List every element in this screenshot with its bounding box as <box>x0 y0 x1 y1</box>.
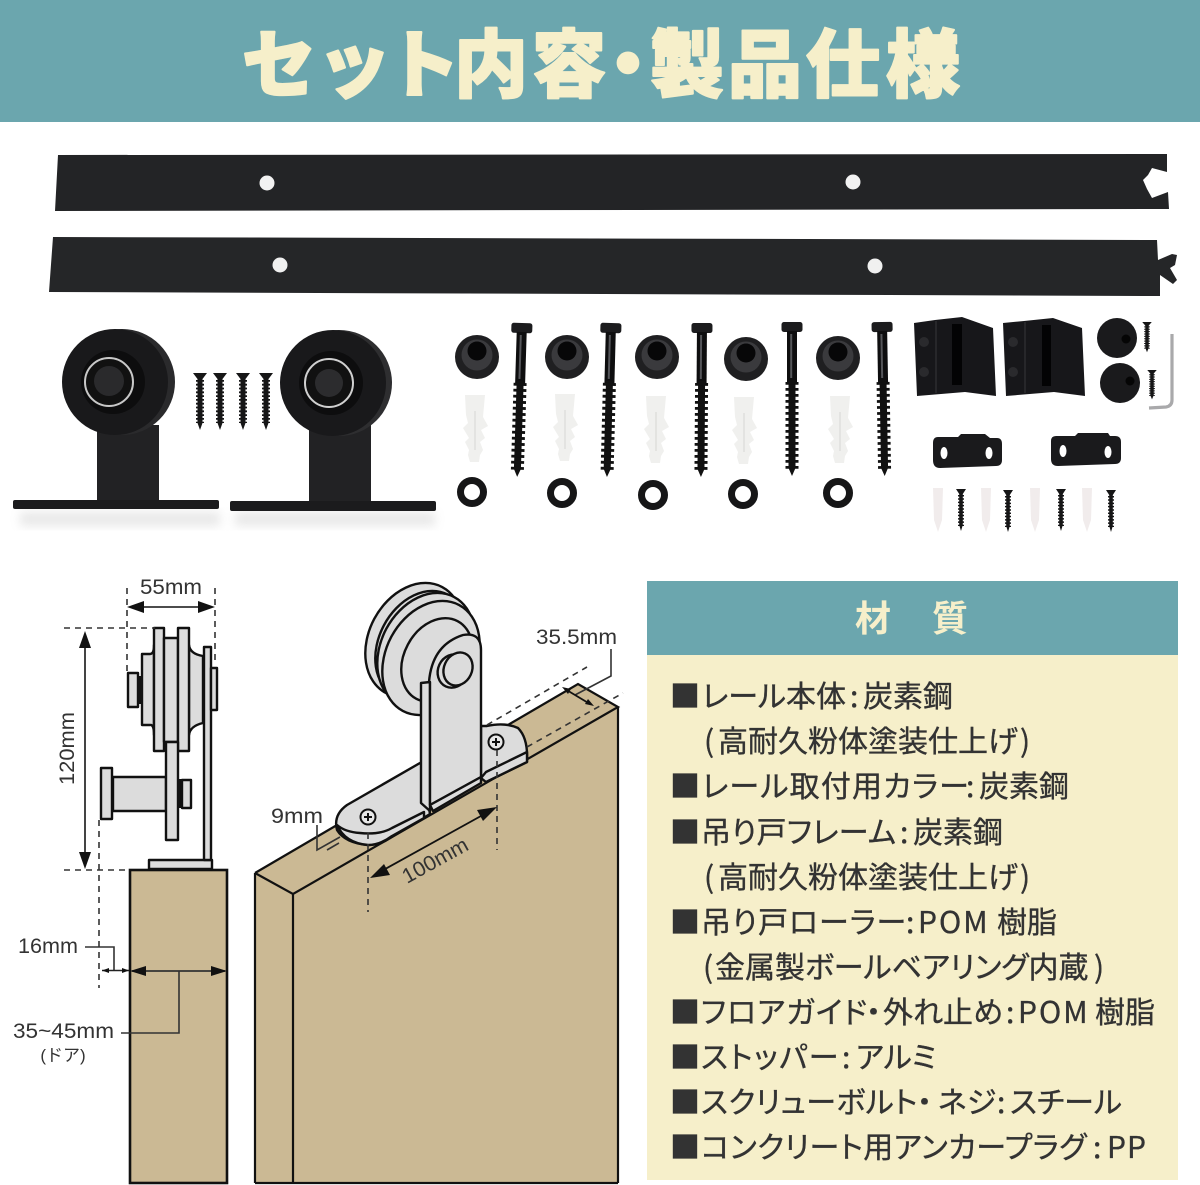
door hanger base plate <box>336 724 527 845</box>
hanger arm <box>421 635 481 811</box>
dimension 9mm: 9mm <box>271 805 323 828</box>
materials list: 樹脂 <box>997 898 1057 942</box>
roller mounting screws <box>193 373 273 430</box>
lag bolts <box>507 322 895 477</box>
materials list: 金属製ボールベアリング内蔵 <box>715 943 1088 987</box>
roller discs <box>346 566 499 732</box>
materials list: : <box>850 672 858 716</box>
materials list: : <box>966 762 974 806</box>
materials list: フロアガイド <box>701 988 868 1032</box>
materials list: スチール <box>1010 1078 1122 1122</box>
materials list: 炭素鋼 <box>913 808 1003 852</box>
small anchors <box>933 488 1092 532</box>
side view diagram <box>13 576 227 1183</box>
materials list: ■ <box>670 1123 700 1167</box>
dimension 16mm: 16mm <box>18 935 78 958</box>
materials list: 炭素鋼 <box>863 672 953 716</box>
materials list: ストッパー <box>701 1033 840 1077</box>
dimension 35.5mm: 35.5mm <box>536 626 617 649</box>
materials list: : <box>900 808 908 852</box>
dimension 55mm <box>127 576 215 672</box>
materials list: POM <box>1018 988 1090 1032</box>
anti-jump brackets <box>933 433 1121 468</box>
washers <box>460 480 850 506</box>
materials list: POM <box>918 898 990 942</box>
materials list: スクリューボルト <box>701 1078 918 1122</box>
materials list: ネジ <box>938 1078 996 1122</box>
dimension 35~45mm door: 35~45mm <box>13 1020 114 1043</box>
materials list: : <box>842 1033 850 1077</box>
materials list: 高耐久粉体塗装仕上げ <box>718 853 1018 897</box>
materials list: ( <box>703 943 713 987</box>
dimension 35~45mm door <box>13 966 227 1065</box>
dimension 9mm <box>271 805 340 850</box>
rail collars <box>455 335 860 381</box>
materials list: ( <box>704 717 714 761</box>
materials list: アルミ <box>856 1033 936 1077</box>
stoppers with screws <box>1097 318 1157 403</box>
door body <box>255 684 618 1183</box>
materials list: 炭素鋼 <box>979 762 1069 806</box>
roller side view <box>101 628 217 869</box>
materials list: レール取付用カラー <box>702 762 970 806</box>
title: セット内容・製品仕様 <box>242 6 960 113</box>
materials list: : <box>1093 1123 1101 1167</box>
materials list: ■ <box>670 672 700 716</box>
materials list: : <box>1006 988 1014 1032</box>
materials list: ) <box>1020 853 1030 897</box>
materials list: 吊り戸ローラー <box>701 898 907 942</box>
dimension 120mm: 120mm <box>56 712 79 785</box>
materials list: ・ <box>866 988 881 1032</box>
dimension 35~45mm door: (ドア) <box>40 1046 86 1065</box>
materials list: ■ <box>670 762 700 806</box>
materials list: 樹脂 <box>1095 988 1155 1032</box>
dimension 55mm: 55mm <box>140 576 202 599</box>
roller left <box>13 329 219 509</box>
floor guides <box>914 317 1085 396</box>
materials list: ■ <box>670 898 700 942</box>
materials list: 高耐久粉体塗装仕上げ <box>718 717 1018 761</box>
soft shadows under rollers <box>20 512 435 526</box>
materials list: PP <box>1107 1123 1147 1167</box>
small screws <box>956 489 1116 532</box>
dimension 16mm <box>18 935 129 973</box>
materials list: 吊り戸フレーム <box>701 808 896 852</box>
materials list: : <box>997 1078 1005 1122</box>
materials list: ■ <box>670 808 700 852</box>
materials list: ) <box>1020 717 1030 761</box>
isometric door diagram <box>255 566 623 1183</box>
dimension 100mm: 100mm <box>398 833 472 888</box>
materials list: ) <box>1094 943 1104 987</box>
header banner <box>0 0 1200 122</box>
materials list: 外れ止め <box>883 988 1003 1032</box>
materials list: : <box>906 898 914 942</box>
concrete anchors <box>463 394 853 464</box>
materials list: ■ <box>670 1033 700 1077</box>
materials list: レール本体 <box>702 672 846 716</box>
materials panel <box>647 581 1178 1180</box>
materials list <box>670 672 1155 1167</box>
dimension 100mm <box>368 750 497 912</box>
dimension 120mm <box>56 628 155 870</box>
materials list: コンクリート用アンカープラグ <box>701 1123 1088 1167</box>
door side section <box>130 870 227 1183</box>
hex key <box>1149 334 1172 408</box>
materials list: ■ <box>670 1078 700 1122</box>
dimension 35.5mm <box>487 626 623 747</box>
materials list: ( <box>704 853 714 897</box>
rail 1 <box>55 154 1169 211</box>
materials list: ■ <box>670 988 700 1032</box>
materials heading: 材質 <box>855 590 968 642</box>
roller right <box>230 330 436 511</box>
rail 2 <box>49 237 1177 296</box>
materials list: ・ <box>917 1078 932 1122</box>
